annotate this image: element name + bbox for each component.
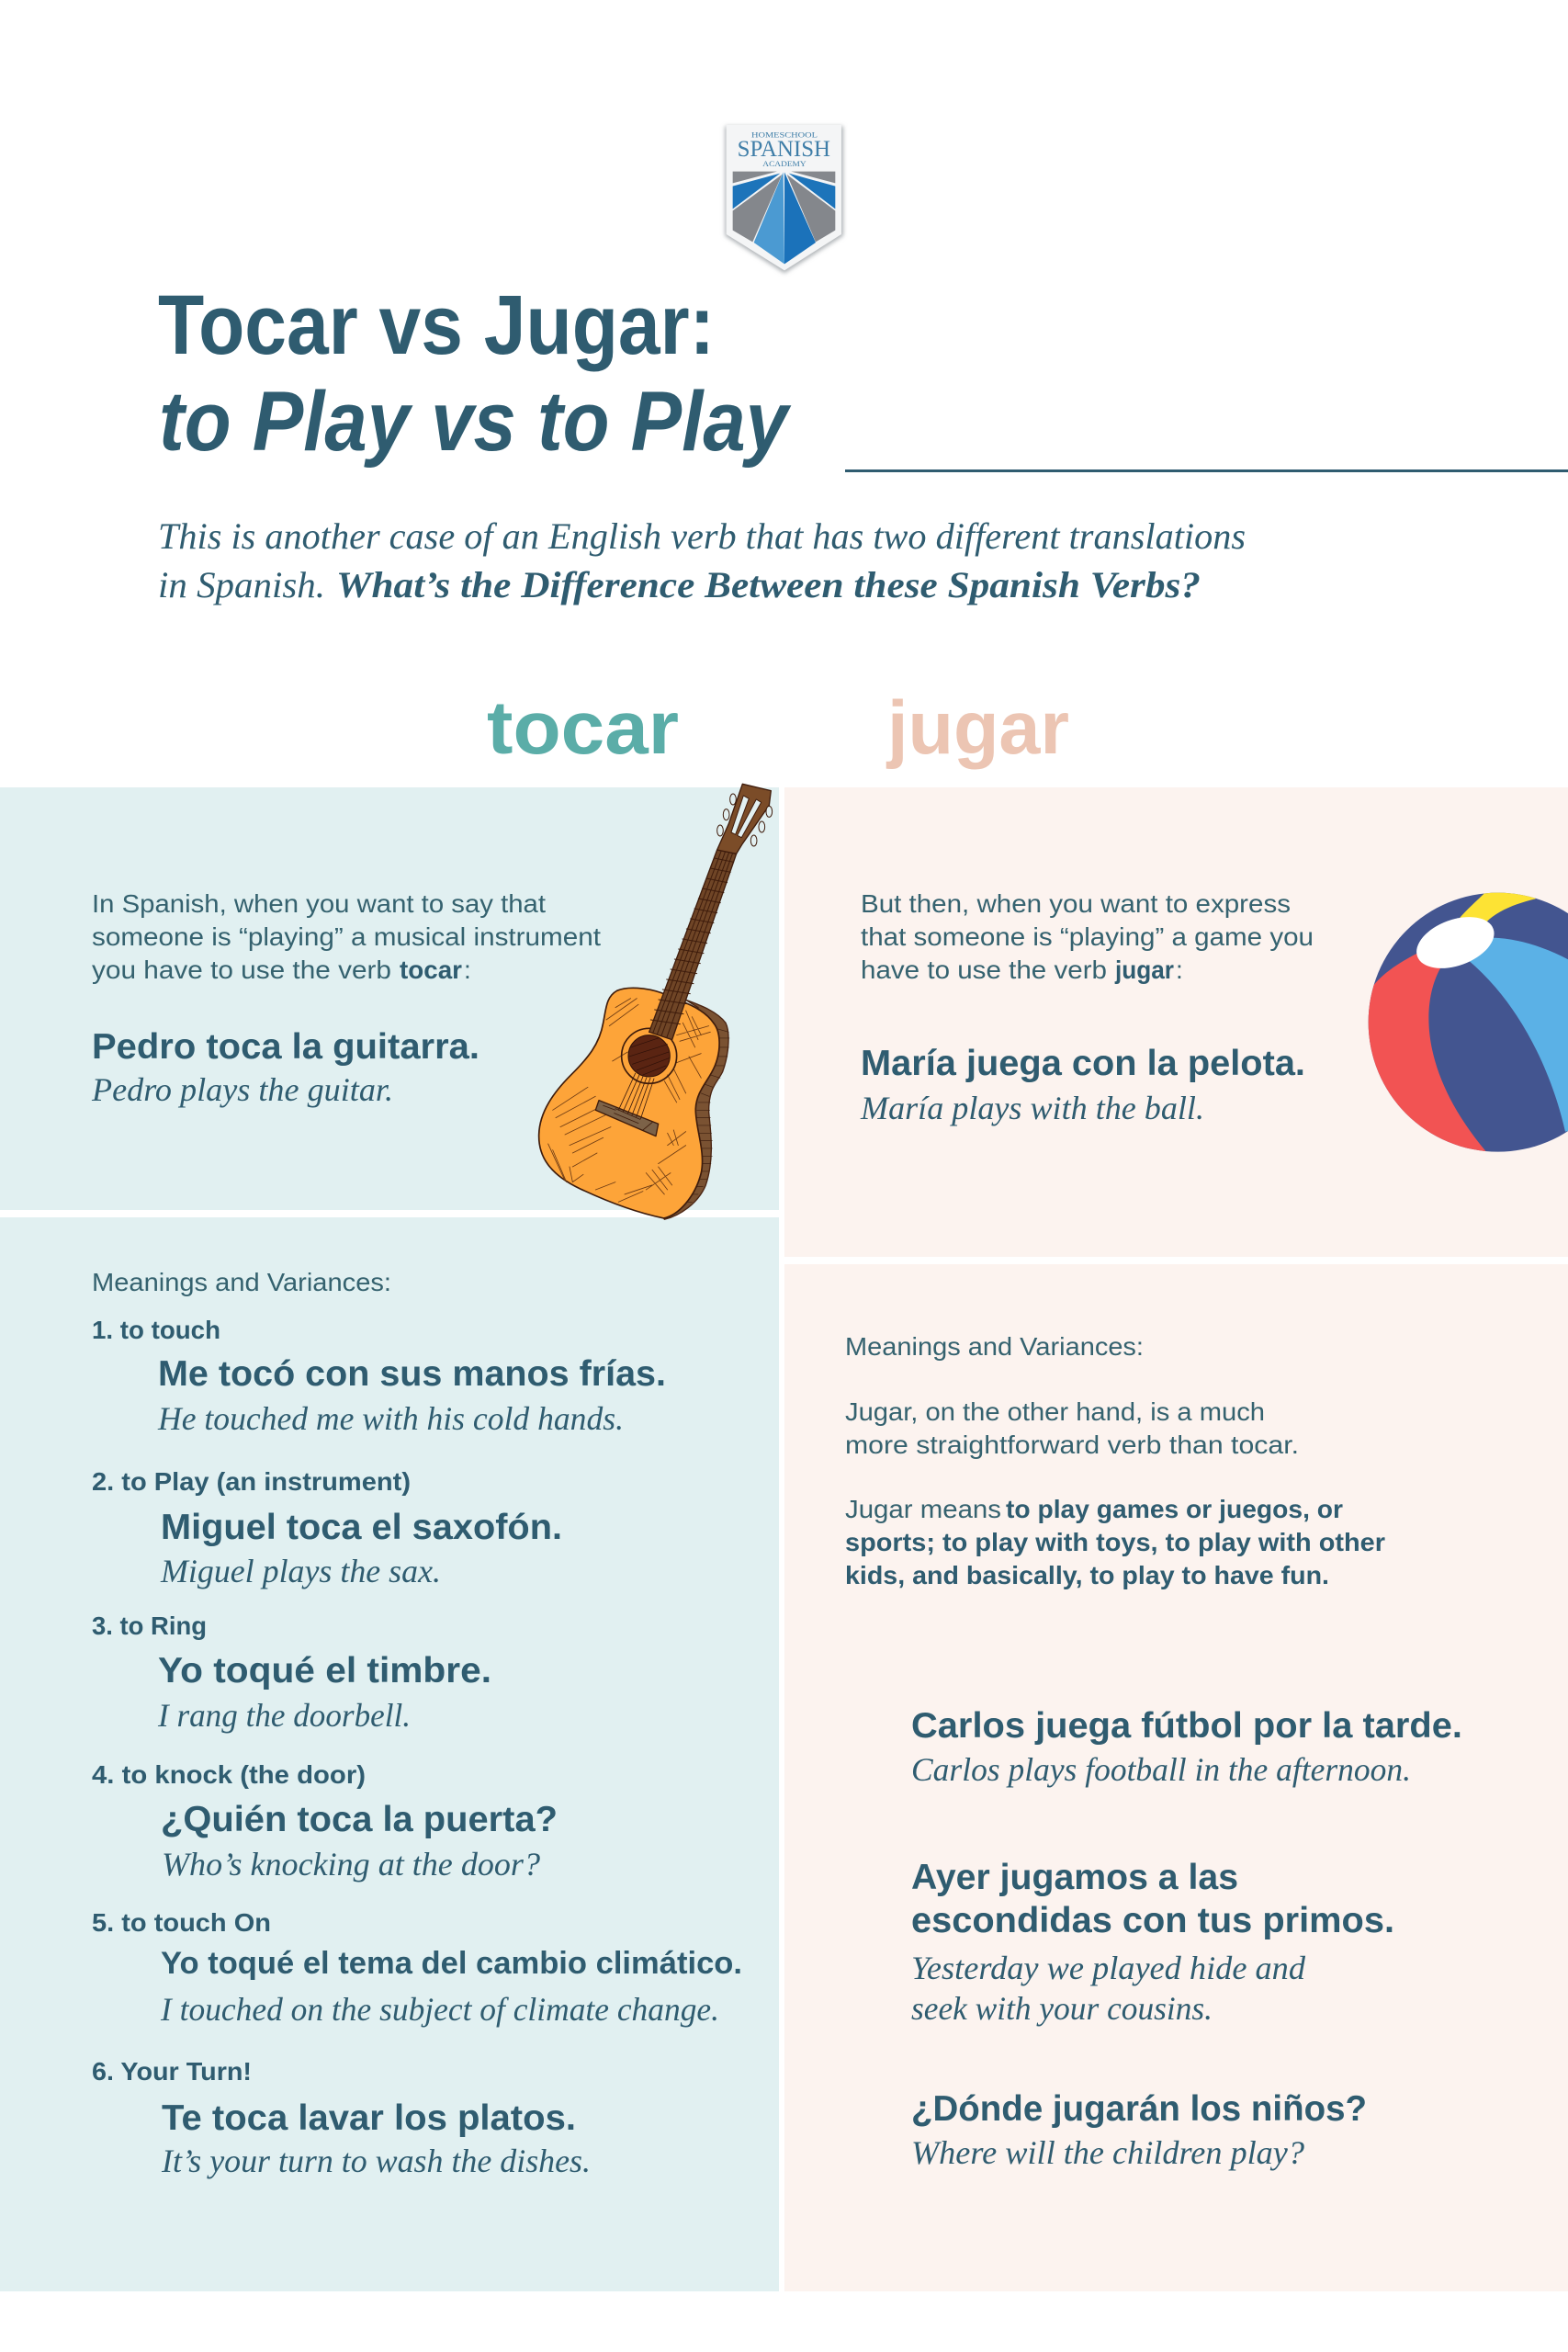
example 1: Carlos plays football in the afternoon. — [911, 1751, 1411, 1788]
meaning 5 — [92, 1908, 742, 2028]
definition paragraph — [845, 1495, 1385, 1589]
meaning 3: 3. to Ring — [92, 1611, 207, 1640]
intro paragraph: In Spanish, when you want to say that — [92, 889, 546, 918]
meaning 4: ¿Quién toca la puerta? — [161, 1800, 558, 1839]
meaning 4: Who’s knocking at the door? — [162, 1846, 540, 1883]
meaning 1: He touched me with his cold hands. — [157, 1400, 624, 1437]
meaning 6: Te toca lavar los platos. — [162, 2098, 576, 2138]
example 3: ¿Dónde jugarán los niños? — [911, 2089, 1367, 2129]
title — [158, 278, 791, 469]
example 2: seek with your cousins. — [911, 1990, 1213, 2027]
subtitle — [158, 515, 1246, 605]
panel: jugar intro — [784, 787, 1568, 1257]
intro paragraph: tocar — [400, 956, 462, 984]
meaning 6: It’s your turn to wash the dishes. — [161, 2143, 591, 2179]
example sentence: María plays with the ball. — [860, 1090, 1204, 1126]
explanation paragraph: more straightforward verb than tocar. — [845, 1430, 1299, 1459]
meaning 6 — [92, 2057, 591, 2179]
intro paragraph: have to use the verb — [861, 956, 1107, 984]
panel: tocar intro — [0, 787, 779, 1210]
example sentence: Pedro plays the guitar. — [91, 1071, 393, 1108]
meanings heading: Meanings and Variances: — [92, 1268, 391, 1296]
meaning 3: Yo toqué el timbre. — [158, 1651, 491, 1690]
example 2: escondidas con tus primos. — [911, 1901, 1394, 1940]
example 2 — [911, 1858, 1394, 2027]
intro paragraph — [92, 889, 601, 984]
meaning 1: Me tocó con sus manos frías. — [158, 1354, 666, 1394]
example sentence: Pedro toca la guitarra. — [92, 1027, 479, 1067]
example 1: Carlos juega fútbol por la tarde. — [911, 1706, 1462, 1746]
logo: Homeschool Spanish Academy shield: SPANISH — [738, 136, 830, 162]
meaning 5: 5. to touch On — [92, 1908, 271, 1937]
intro paragraph: that someone is “playing” a game you — [861, 922, 1314, 951]
meaning 2: Miguel toca el saxofón. — [161, 1508, 562, 1547]
meaning 5: I touched on the subject of climate change. — [160, 1991, 719, 2028]
intro paragraph: you have to use the verb — [92, 956, 391, 984]
subtitle: in Spanish. — [158, 564, 325, 605]
heading: tocar: tocar — [487, 686, 679, 770]
panel: jugar meanings — [784, 1264, 1568, 2291]
title: to Play vs to Play — [159, 375, 791, 469]
definition paragraph: sports; to play with toys, to play with other — [845, 1528, 1385, 1556]
intro paragraph: someone is “playing” a musical instrument — [92, 922, 601, 951]
intro paragraph: : — [464, 956, 471, 984]
example 2: Ayer jugamos a las — [911, 1858, 1238, 1897]
meaning 1: 1. to touch — [92, 1316, 220, 1344]
meaning 6: 6. Your Turn! — [92, 2057, 252, 2086]
title: Tocar vs Jugar: — [158, 278, 715, 372]
meaning 2: Miguel plays the sax. — [160, 1553, 441, 1589]
example 1 — [911, 1706, 1462, 1788]
intro paragraph: : — [1176, 956, 1183, 984]
explanation paragraph: Jugar, on the other hand, is a much — [845, 1397, 1265, 1426]
meaning 1 — [92, 1316, 666, 1437]
logo: Homeschool Spanish Academy shield: ACADEMY — [762, 160, 807, 168]
definition paragraph: Jugar means — [845, 1495, 1001, 1523]
meaning 3: I rang the doorbell. — [157, 1697, 411, 1734]
meanings heading: Meanings and Variances: — [845, 1332, 1144, 1361]
subtitle: What’s the Difference Between these Spanish Verbs? — [336, 564, 1201, 605]
example 3: Where will the children play? — [911, 2134, 1304, 2171]
example sentence — [860, 1044, 1305, 1126]
explanation paragraph — [845, 1397, 1299, 1459]
logo: Homeschool Spanish Academy shield — [725, 125, 843, 273]
panel: tocar meanings — [0, 1217, 779, 2291]
heading: jugar: jugar — [886, 686, 1069, 770]
example 3 — [911, 2089, 1367, 2171]
meaning 5: Yo toqué el tema del cambio climático. — [161, 1946, 742, 1981]
meaning 4: 4. to knock (the door) — [92, 1760, 366, 1789]
example sentence — [91, 1027, 479, 1108]
intro paragraph — [861, 889, 1314, 984]
definition paragraph: kids, and basically, to play to have fun. — [845, 1561, 1329, 1589]
meaning 2: 2. to Play (an instrument) — [92, 1467, 411, 1496]
icon: beach ball — [1362, 891, 1568, 1155]
logo: Homeschool Spanish Academy shield: HOMESCHOOL — [751, 130, 818, 139]
intro paragraph: jugar — [1114, 956, 1174, 984]
example 2: Yesterday we played hide and — [911, 1950, 1306, 1986]
definition paragraph: to play games or juegos, or — [1006, 1495, 1343, 1523]
example sentence: María juega con la pelota. — [861, 1044, 1305, 1083]
meaning 4 — [92, 1760, 558, 1883]
intro paragraph: But then, when you want to express — [861, 889, 1291, 918]
icon: acoustic guitar — [539, 784, 773, 1219]
meaning 3 — [92, 1611, 491, 1734]
subtitle: This is another case of an English verb that has two different translations — [158, 515, 1246, 557]
meaning 2 — [92, 1467, 562, 1589]
